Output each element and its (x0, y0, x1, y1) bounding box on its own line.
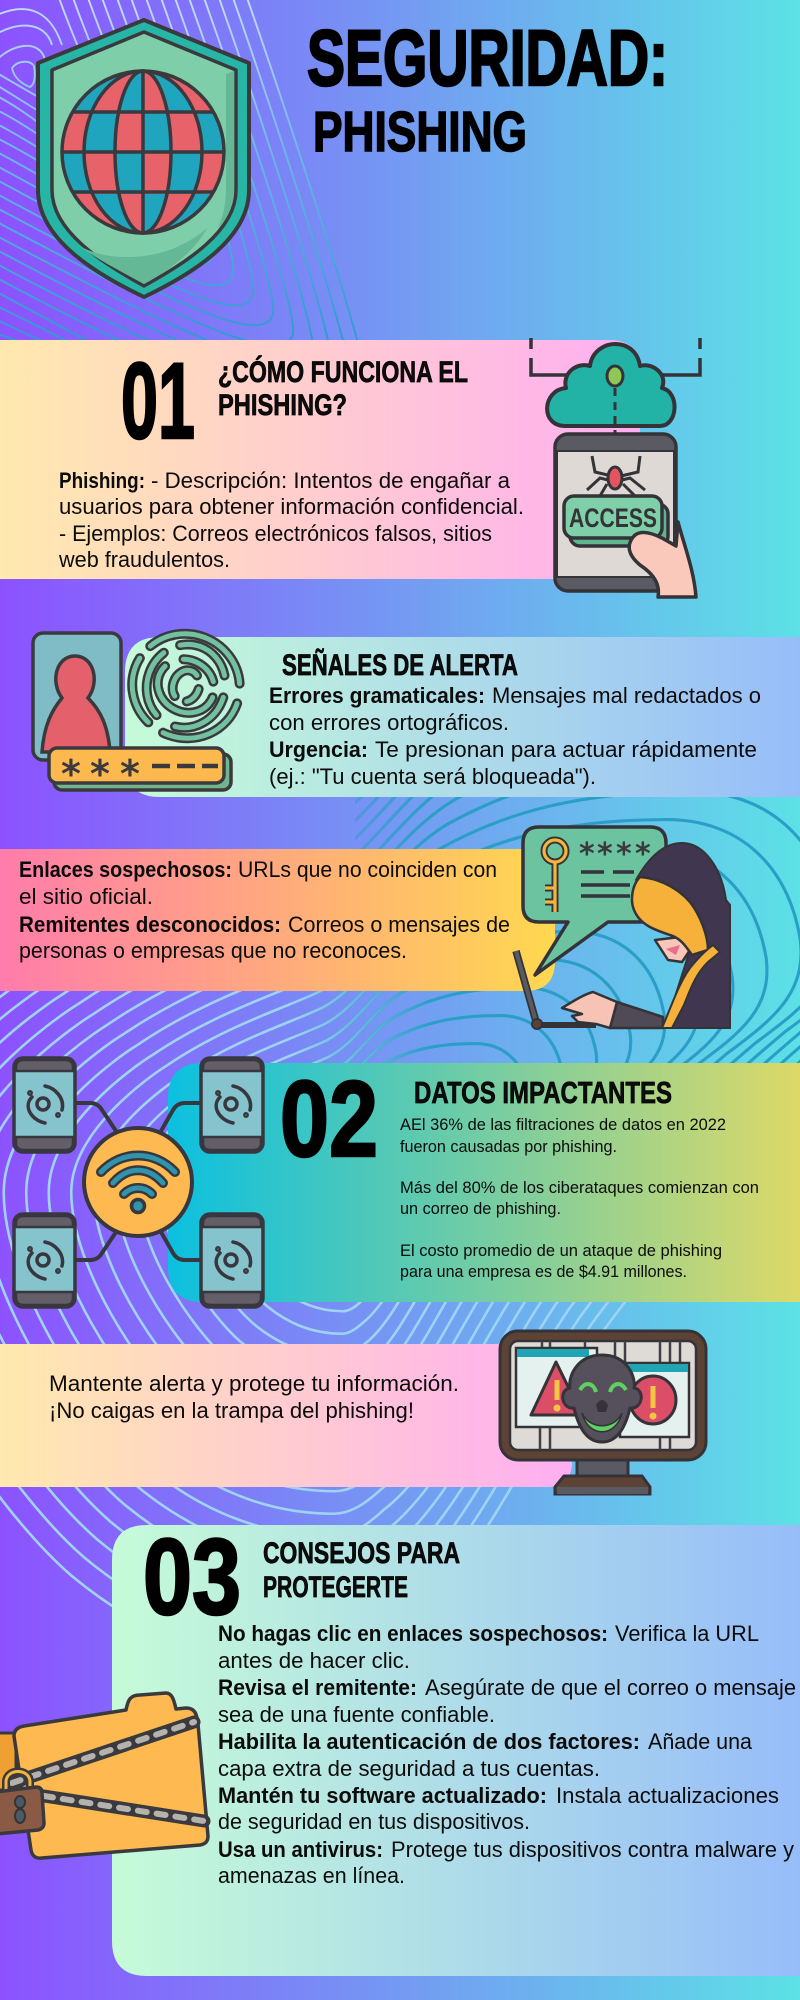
text: enlaces y remitentes: el sitio oficial. (19, 884, 153, 909)
text: descripcion phishing (58, 468, 524, 572)
heading: consejos: CONSEJOS PARA (263, 1537, 460, 1570)
text: errores y urgencia: Urgencia: (269, 737, 368, 762)
number 03: 03 (143, 1516, 241, 1637)
heading: como funciona (218, 355, 468, 422)
background contour lines: lower (0, 991, 626, 1608)
panel: como funciona (0, 340, 640, 579)
text: enlaces y remitentes: URLs que no coinciden con (238, 857, 497, 882)
heading: datos: DATOS IMPACTANTES (414, 1075, 672, 1110)
text: estadisticas: un correo de phishing. (400, 1199, 561, 1218)
text: descripcion phishing: usuarios para obtener información confidencial. (59, 494, 524, 519)
text: estadisticas: Más del 80% de los ciberataques comienzan con (400, 1178, 759, 1197)
text: enlaces y remitentes: Enlaces sospechosos: (19, 857, 232, 882)
text: consejos: Protege tus dispositivos contra malware y (391, 1837, 794, 1862)
heading: como funciona: PHISHING? (218, 389, 347, 422)
title: PHISHING (313, 100, 527, 164)
background contour lines: around hacker (300, 797, 800, 1063)
icon: wifi network with four phones (14, 1058, 263, 1307)
text: consejos: Verifica la URL (615, 1621, 759, 1646)
title: SEGURIDAD: (307, 13, 668, 102)
icon: locked folder with chains (0, 1693, 208, 1858)
text: consejos: Mantén tu software actualizado: (218, 1783, 547, 1808)
text: estadisticas: para una empresa es de $4.91 millones. (400, 1262, 687, 1281)
text: consejos (218, 1621, 796, 1888)
text: errores y urgencia: Errores gramaticales: (269, 683, 485, 708)
label: access: ACCESS (569, 503, 657, 533)
heading: como funciona: ¿CÓMO FUNCIONA EL (218, 355, 468, 389)
text: descripcion phishing: web fraudulentos. (58, 547, 230, 572)
text: enlaces y remitentes: Correos o mensajes de (288, 912, 510, 937)
text: descripcion phishing: - Ejemplos: Correos electrónicos falsos, sitios (59, 521, 492, 546)
text: estadisticas: El costo promedio de un ataque de phishing (400, 1241, 722, 1260)
text: consejos: sea de una fuente confiable. (218, 1702, 495, 1727)
icon: monitor with skull and warnings (500, 1331, 706, 1494)
heading: senales: SEÑALES DE ALERTA (282, 648, 518, 682)
panel: consejos (112, 1516, 800, 1976)
text: consejos: de seguridad en tus dispositivos. (218, 1809, 530, 1834)
text: consejos: capa extra de seguridad a tus cuentas. (218, 1756, 600, 1781)
text: errores y urgencia: con errores ortográficos. (269, 710, 509, 735)
text: errores y urgencia: Te presionan para actuar rápidamente (375, 737, 757, 762)
text: descripcion phishing: Phishing: (59, 468, 145, 493)
text: enlaces y remitentes: personas o empresas que no reconoces. (19, 938, 407, 963)
text: consejos: Usa un antivirus: (218, 1837, 383, 1862)
text: estadisticas (400, 1115, 759, 1281)
number 02: 02 (280, 1058, 378, 1179)
text: consejos: No hagas clic en enlaces sospechosos: (218, 1621, 608, 1646)
background contour lines: top left (0, 0, 373, 425)
title (307, 13, 668, 164)
text: mantente alerta: ¡No caigas en la trampa del phishing! (49, 1398, 414, 1423)
icon: person, fingerprint and password (33, 619, 255, 796)
text: consejos: amenazas en línea. (218, 1863, 405, 1888)
panel: senales de alerta (125, 637, 800, 797)
text: estadisticas: fueron causadas por phishing. (400, 1137, 617, 1156)
text: consejos: Revisa el remitente: (218, 1675, 417, 1700)
heading: consejos: PROTEGERTE (263, 1571, 408, 1604)
text: consejos: antes de hacer clic. (218, 1648, 410, 1673)
panel: mantente alerta (0, 1344, 572, 1487)
text: enlaces y remitentes (19, 857, 510, 963)
text: consejos: Asegúrate de que el correo o mensaje (425, 1675, 796, 1700)
text: errores y urgencia: (ej.: "Tu cuenta será bloqueada"). (269, 764, 596, 789)
text: consejos: Habilita la autenticación de dos factores: (218, 1729, 640, 1754)
icon: shield with globe (38, 20, 249, 297)
icon: cloud, phone, spider and access button (531, 338, 700, 597)
text: mantente alerta (49, 1371, 459, 1423)
text: errores y urgencia (269, 683, 761, 789)
text: mantente alerta: Mantente alerta y protege tu información. (49, 1371, 459, 1396)
text: consejos: Añade una (648, 1729, 753, 1754)
number 01: 01 (121, 340, 195, 461)
label: password asterisks: *** (61, 752, 140, 796)
text: errores y urgencia: Mensajes mal redactados o (492, 683, 761, 708)
label: key code asterisks: **** (579, 837, 651, 872)
text: descripcion phishing: - Descripción: Intentos de engañar a (151, 468, 511, 493)
text: consejos: Instala actualizaciones (556, 1783, 779, 1808)
panel: enlaces y remitentes (0, 849, 555, 991)
heading: consejos (263, 1537, 460, 1604)
panel: datos impactantes (168, 1058, 800, 1302)
text: enlaces y remitentes: Remitentes desconocidos: (19, 912, 281, 937)
icon: hacker with key speech bubble and laptop (516, 827, 730, 1029)
text: estadisticas: AEl 36% de las filtraciones de datos en 2022 (400, 1115, 726, 1134)
